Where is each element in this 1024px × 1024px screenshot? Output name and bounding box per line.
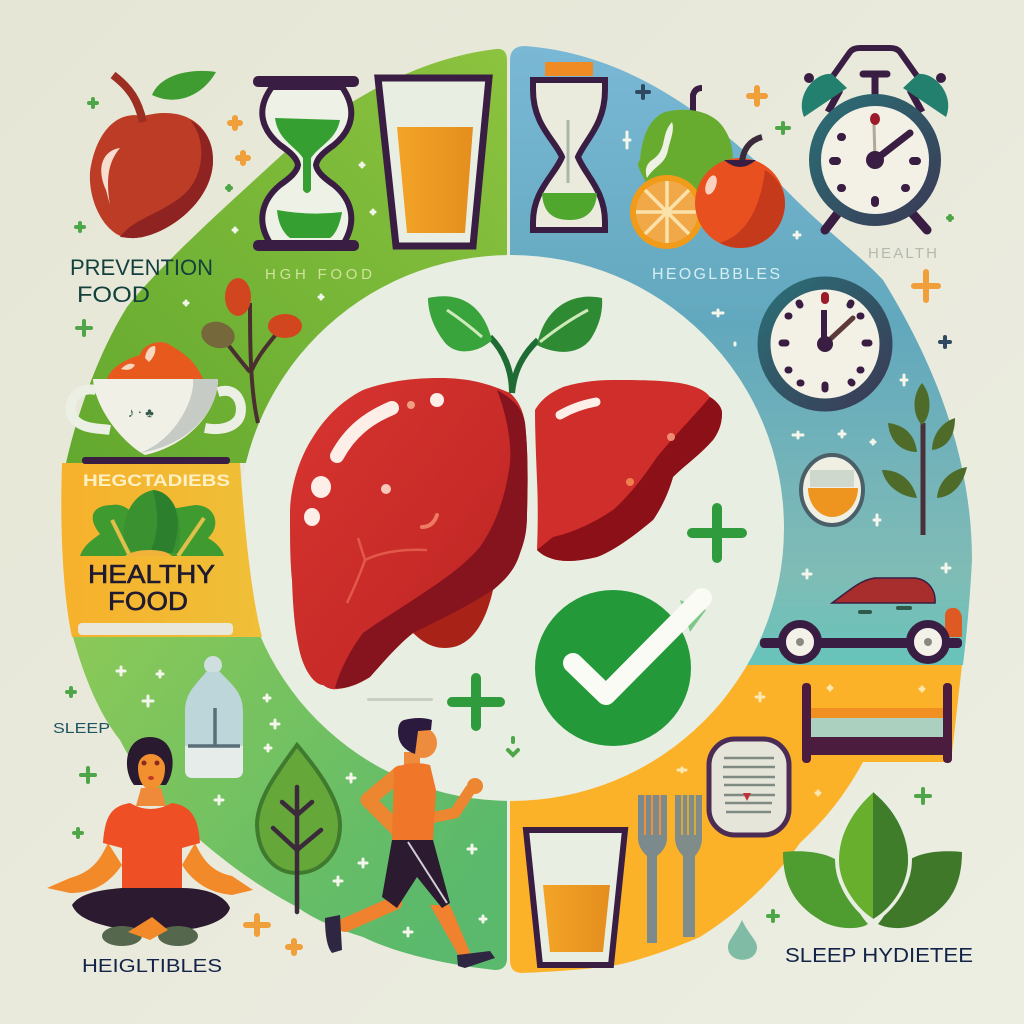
decorative dark sparkles xyxy=(637,86,950,347)
liver: highlights xyxy=(304,393,675,603)
icon: branch with berries xyxy=(198,278,302,423)
label: sleep hydiete: SLEEP HYDIETEE xyxy=(785,945,973,967)
label: prevention food xyxy=(70,255,213,307)
icon: plant right xyxy=(882,383,967,535)
icon: juice glass top xyxy=(378,78,489,246)
label: prevention food: FOOD xyxy=(77,282,150,307)
icon: water bottle xyxy=(185,656,243,778)
ring segment: top-left green xyxy=(66,49,507,463)
label: prevention food: PREVENTION xyxy=(70,255,213,280)
icon: teacup xyxy=(71,342,241,455)
icon: pear, orange and tomato xyxy=(630,88,785,249)
icon: hourglass green xyxy=(253,76,359,251)
icon: small oval glass xyxy=(801,455,863,525)
panel: healthy food yellow block xyxy=(61,457,262,637)
liver: lower lobe xyxy=(410,590,493,648)
shadow line under liver xyxy=(367,698,433,701)
icon: document badge xyxy=(709,739,789,835)
icon: car xyxy=(760,578,962,660)
heading: healthy food: HEALTHY xyxy=(88,559,215,589)
icon: plant sprout on liver xyxy=(428,296,602,393)
icon: apple xyxy=(90,71,216,238)
label: vegetables blue: HEOGLBBLES xyxy=(652,266,780,283)
icon: leaf tree xyxy=(257,745,340,912)
icon: forks xyxy=(638,795,702,943)
decorative down arrow xyxy=(508,750,518,755)
icon: wall clock xyxy=(764,283,886,405)
icon: running man xyxy=(325,718,495,968)
decorative green sparkles xyxy=(67,99,952,921)
icon: water drop xyxy=(728,920,757,960)
label: food faint: HGH FOOD xyxy=(265,266,372,283)
decorative white sparkles xyxy=(117,132,950,936)
ring segment: bottom-left green xyxy=(73,637,507,970)
panel: healthy food yellow block: FOOD xyxy=(108,586,188,616)
decorative yellow sparkles xyxy=(678,686,924,795)
ring segment: bottom-right yellow xyxy=(510,665,962,973)
icon: check mark badge xyxy=(535,590,706,746)
icon: alarm clock xyxy=(802,48,948,230)
label: vegetables bottom: HEIGLTIBLES xyxy=(82,956,222,976)
ring segment: top-right blue xyxy=(510,46,972,665)
icon: meditating person xyxy=(47,737,253,946)
liver: left lobe xyxy=(290,378,528,689)
decorative orange sparkles xyxy=(230,88,938,953)
icon: plus upper xyxy=(692,508,742,558)
liver: right lobe shadow xyxy=(537,397,722,561)
liver: right lobe xyxy=(535,380,722,561)
label: health faint: HEALTH xyxy=(868,245,937,262)
liver xyxy=(290,378,722,689)
icon: hourglass blue panel xyxy=(533,62,605,230)
icon: big leaves xyxy=(783,790,962,928)
icon: plus lower xyxy=(452,678,500,726)
icon: teacup: ♪ ⸱ ♣ xyxy=(128,405,154,420)
liver: left lobe shadow xyxy=(335,390,528,689)
centre circle xyxy=(238,255,784,801)
label: vegetables: HEGCTADIEBS xyxy=(83,471,230,490)
icon: juice glass bottom xyxy=(526,830,625,965)
icon: leafy greens xyxy=(80,490,224,556)
icon: bed xyxy=(802,683,952,763)
label: sleep small: SLEEP xyxy=(53,720,110,737)
